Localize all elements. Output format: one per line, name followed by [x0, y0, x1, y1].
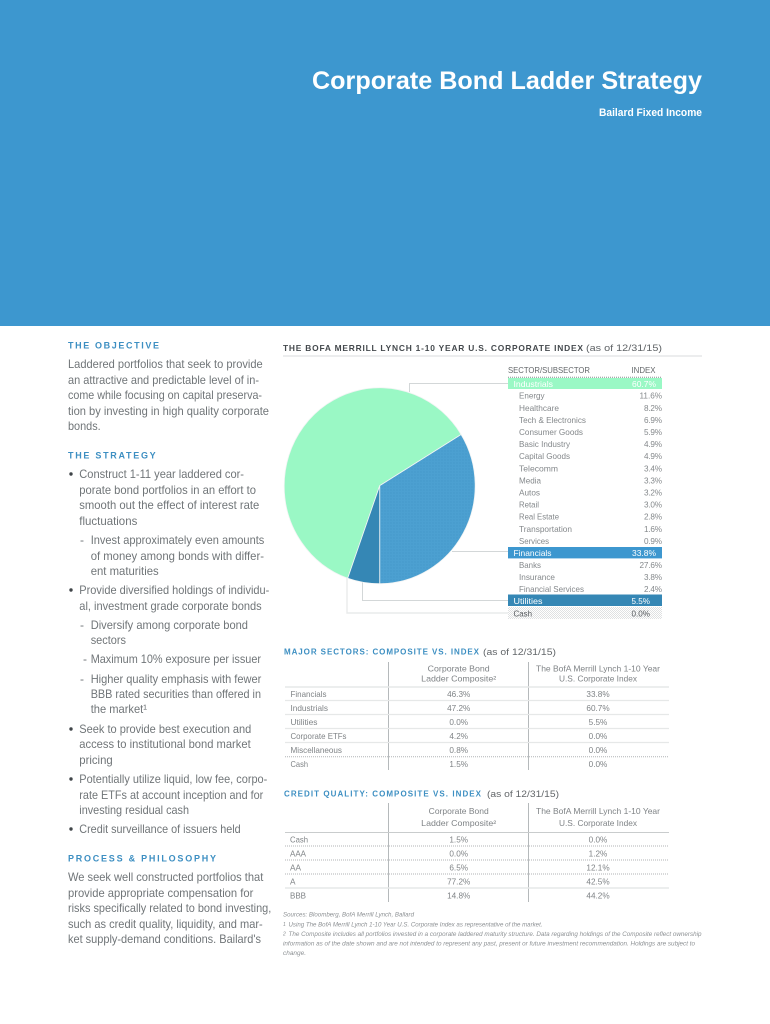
major sector rows: 0.0%: [589, 760, 607, 769]
strategy bullets: rate ETFs at account inception and for: [79, 788, 263, 802]
credit quality rows: 6.5%: [449, 864, 468, 872]
major sector rows: 60.7%: [586, 704, 610, 713]
process text: such as credit quality, liquidity, and mar-: [68, 917, 263, 931]
industrials subsectors: Tech & Electronics: [519, 416, 586, 425]
industrials subsectors: 5.9%: [644, 428, 662, 437]
subtitle: Bailard Fixed Income: [599, 107, 702, 119]
heading: the objective: THE OBJECTIVE: [68, 340, 159, 350]
footnotes: information as of the date shown and are not intended to represent any past, present or future investment recommendation. Holdings are subject to: [283, 940, 695, 948]
row: utilities: Utilities: [514, 597, 542, 606]
objective text: tion by investing in high quality corporate: [68, 404, 269, 418]
credit quality rows: 12.1%: [586, 864, 610, 872]
major sector rows: 46.3%: [447, 690, 470, 699]
major sector rows: 0.0%: [589, 732, 607, 741]
row: utilities: [508, 594, 662, 606]
heading: the strategy: THE STRATEGY: [68, 450, 156, 460]
credit quality rows: A: [290, 878, 296, 886]
pie slice: financials 33.8%: [380, 434, 475, 584]
row: financials: [508, 547, 662, 558]
financials subsectors: Banks: [519, 561, 541, 570]
strategy bullets: Seek to provide best execution and: [79, 722, 251, 736]
industrials subsectors: 3.3%: [644, 476, 662, 485]
industrials subsectors: Telecomm: [519, 464, 558, 473]
objective text: bonds.: [68, 419, 101, 433]
industrials subsectors: Basic Industry: [519, 440, 571, 449]
row: industrials: Industrials: [514, 380, 553, 389]
credit quality rows: 0.0%: [449, 850, 468, 858]
major sector rows: 0.8%: [449, 746, 468, 755]
financials subsectors: 2.4%: [644, 585, 662, 594]
strategy bullets: Higher quality emphasis with fewer: [91, 672, 261, 686]
credit quality heading: [284, 789, 559, 799]
industrials subsectors: 11.6%: [640, 392, 662, 401]
credit quality rows: 42.5%: [586, 878, 610, 886]
panel: left column text: [68, 340, 271, 946]
process text: provide appropriate compensation for: [68, 886, 253, 900]
index heading: (as of 12/31/15): [586, 343, 662, 353]
strategy bullets: al, investment grade corporate bonds: [79, 599, 262, 613]
industrials subsectors: 2.8%: [644, 513, 662, 522]
major sector rows: 4.2%: [449, 732, 468, 741]
financials subsectors: 27.6%: [640, 561, 662, 570]
major sectors table: U.S. Corporate Index: [559, 675, 637, 684]
strategy bullets: smooth out the effect of interest rate: [79, 498, 260, 512]
strategy bullets: -: [83, 652, 87, 666]
industrials subsectors: 1.6%: [644, 525, 662, 534]
heading: process and philosophy: PROCESS & PHILOSOPHY: [68, 854, 216, 864]
credit quality table: Corporate Bond: [429, 807, 489, 816]
strategy bullets: Construct 1-11 year laddered cor-: [79, 467, 244, 481]
pie chart: [284, 388, 475, 584]
title: Corporate Bond Ladder Strategy: [312, 67, 702, 95]
industrials subsectors: Transportation: [519, 525, 572, 534]
table header: [508, 366, 662, 377]
strategy bullets: porate bond portfolios in an effort to: [79, 483, 256, 497]
table header: INDEX: [632, 366, 656, 375]
major sectors table: [285, 662, 669, 770]
industrials subsectors: 4.9%: [644, 440, 662, 449]
strategy bullets: investing residual cash: [79, 803, 189, 817]
major sector rows: 0.0%: [589, 746, 607, 755]
process text: ket supply-demand conditions. Bailard's: [68, 932, 261, 946]
strategy bullets: Credit surveillance of issuers held: [79, 822, 241, 836]
industrials subsectors: Media: [519, 476, 541, 485]
strategy bullets: -: [80, 672, 84, 686]
major sector rows: Miscellaneous: [290, 746, 342, 755]
objective text: come while focusing on capital preserva-: [68, 388, 262, 402]
strategy bullets: pricing: [79, 753, 113, 767]
objective text: an attractive and predictable level of in-: [68, 373, 259, 387]
industrials subsectors: Consumer Goods: [519, 428, 583, 437]
row: cash: Cash: [514, 610, 532, 618]
credit quality heading: CREDIT QUALITY: COMPOSITE VS. INDEX: [284, 790, 482, 798]
credit quality rows: AA: [290, 864, 302, 872]
footnotes: Using The BofA Merrill Lynch 1-10 Year U.S. Corporate Index as representative of the market.: [288, 922, 543, 928]
footnotes: 2: [282, 932, 286, 938]
financials subsectors: Insurance: [519, 573, 555, 582]
strategy bullets: Diversify among corporate bond: [91, 618, 248, 632]
footnotes: [282, 912, 702, 957]
chart leader lines: [347, 384, 508, 613]
row: industrials: 60.7%: [632, 380, 656, 389]
industrials subsectors: 3.4%: [644, 464, 662, 473]
footnotes: change.: [283, 950, 306, 957]
credit quality rows: 14.8%: [447, 892, 470, 900]
industrials subsectors: 8.2%: [644, 404, 662, 413]
credit quality table: U.S. Corporate Index: [559, 819, 637, 828]
credit quality rows: BBB: [290, 892, 307, 900]
major sector rows: 1.5%: [449, 760, 468, 769]
industrials subsectors: Energy: [519, 392, 545, 401]
major sector rows: 47.2%: [447, 704, 470, 713]
credit quality rows: 77.2%: [447, 878, 470, 886]
row: industrials: [508, 378, 662, 389]
strategy bullets: Maximum 10% exposure per issuer: [91, 652, 261, 666]
process text: We seek well constructed portfolios that: [68, 870, 264, 884]
credit quality rows: 0.0%: [589, 836, 607, 844]
major sector rows: [290, 690, 610, 769]
row: cash: [508, 607, 662, 619]
strategy bullets: Provide diversified holdings of individu-: [79, 583, 269, 597]
major sectors table: Corporate Bond: [428, 664, 490, 674]
financials subsectors: [519, 561, 662, 594]
strategy bullets: -: [80, 618, 84, 632]
strategy bullets: -: [80, 533, 84, 547]
process text: risks specifically related to bond investing,: [68, 901, 271, 915]
credit quality rows: 44.2%: [586, 892, 610, 900]
industrials subsectors: 0.9%: [644, 537, 662, 546]
industrials subsectors: [519, 392, 662, 546]
major sector rows: Cash: [290, 760, 308, 769]
strategy bullets: BBB rated securities than offered in: [91, 687, 261, 701]
strategy bullets: the market¹: [91, 702, 147, 716]
row: financials: Financials: [514, 549, 552, 558]
strategy bullets: fluctuations: [79, 514, 137, 528]
major sector rows: 33.8%: [586, 690, 610, 699]
pie slice: utilities 5.5%: [348, 486, 380, 584]
financials subsectors: Financial Services: [519, 585, 584, 594]
row: cash: 0.0%: [632, 610, 650, 618]
objective text: [68, 357, 269, 433]
footnotes: Sources: Bloomberg, BofA Merrill Lynch, Ballard: [283, 912, 414, 918]
objective text: Laddered portfolios that seek to provide: [68, 357, 263, 371]
major sector rows: Industrials: [290, 704, 328, 713]
major sectors heading: (as of 12/31/15): [483, 647, 556, 657]
major sector rows: Utilities: [290, 718, 318, 727]
header banner: [0, 0, 770, 326]
credit quality table: The BofA Merrill Lynch 1-10 Year: [536, 807, 660, 816]
financials subsectors: 3.8%: [644, 573, 662, 582]
major sector rows: Corporate ETFs: [290, 732, 346, 741]
strategy bullets: [69, 467, 269, 836]
footnotes: 1: [283, 922, 286, 928]
pie slice: industrials 60.7%: [284, 388, 461, 578]
industrials subsectors: Autos: [519, 488, 540, 498]
major sector rows: Financials: [290, 690, 326, 699]
sector table: [508, 366, 662, 619]
credit quality rows: AAA: [290, 850, 307, 858]
strategy bullets: sectors: [91, 633, 126, 647]
strategy bullets: of money among bonds with differ-: [91, 549, 264, 563]
strategy bullets: ent maturities: [91, 564, 159, 578]
index heading: [283, 343, 702, 356]
industrials subsectors: 4.9%: [644, 452, 662, 461]
industrials subsectors: 6.9%: [644, 416, 662, 425]
industrials subsectors: 3.2%: [644, 488, 662, 498]
row: financials: 33.8%: [632, 549, 656, 558]
major sectors heading: MAJOR SECTORS: COMPOSITE VS. INDEX: [284, 648, 480, 656]
strategy bullets: Potentially utilize liquid, low fee, corpo-: [79, 772, 267, 786]
strategy bullets: access to institutional bond market: [79, 737, 251, 751]
table header: SECTOR/SUBSECTOR: [508, 366, 590, 375]
major sector rows: 5.5%: [589, 718, 607, 727]
industrials subsectors: Retail: [519, 501, 539, 510]
credit quality rows: 1.2%: [589, 850, 607, 858]
strategy bullets: Invest approximately even amounts: [91, 533, 264, 547]
footnotes: The Composite includes all portfolios invested in a corporate laddered maturity structure. Data regarding holdings of the Composite reflect ownership: [288, 931, 702, 938]
row: utilities: 5.5%: [632, 597, 650, 606]
index heading: THE BOFA MERRILL LYNCH 1-10 YEAR U.S. CORPORATE INDEX: [283, 343, 583, 353]
credit quality rows: 1.5%: [449, 836, 468, 844]
process text: [68, 870, 271, 946]
industrials subsectors: Real Estate: [519, 513, 559, 522]
industrials subsectors: Capital Goods: [519, 452, 570, 461]
credit quality table: [285, 803, 669, 902]
credit quality heading: (as of 12/31/15): [487, 789, 559, 799]
major sectors table: The BofA Merrill Lynch 1-10 Year: [536, 664, 660, 674]
major sectors table: Ladder Composite²: [421, 675, 496, 684]
industrials subsectors: Healthcare: [519, 404, 559, 413]
industrials subsectors: Services: [519, 537, 549, 546]
credit quality rows: [290, 836, 610, 900]
credit quality table: Ladder Composite²: [421, 819, 496, 828]
major sectors heading: [284, 647, 556, 657]
major sector rows: 0.0%: [449, 718, 468, 727]
credit quality rows: Cash: [290, 836, 308, 844]
industrials subsectors: 3.0%: [644, 501, 662, 510]
